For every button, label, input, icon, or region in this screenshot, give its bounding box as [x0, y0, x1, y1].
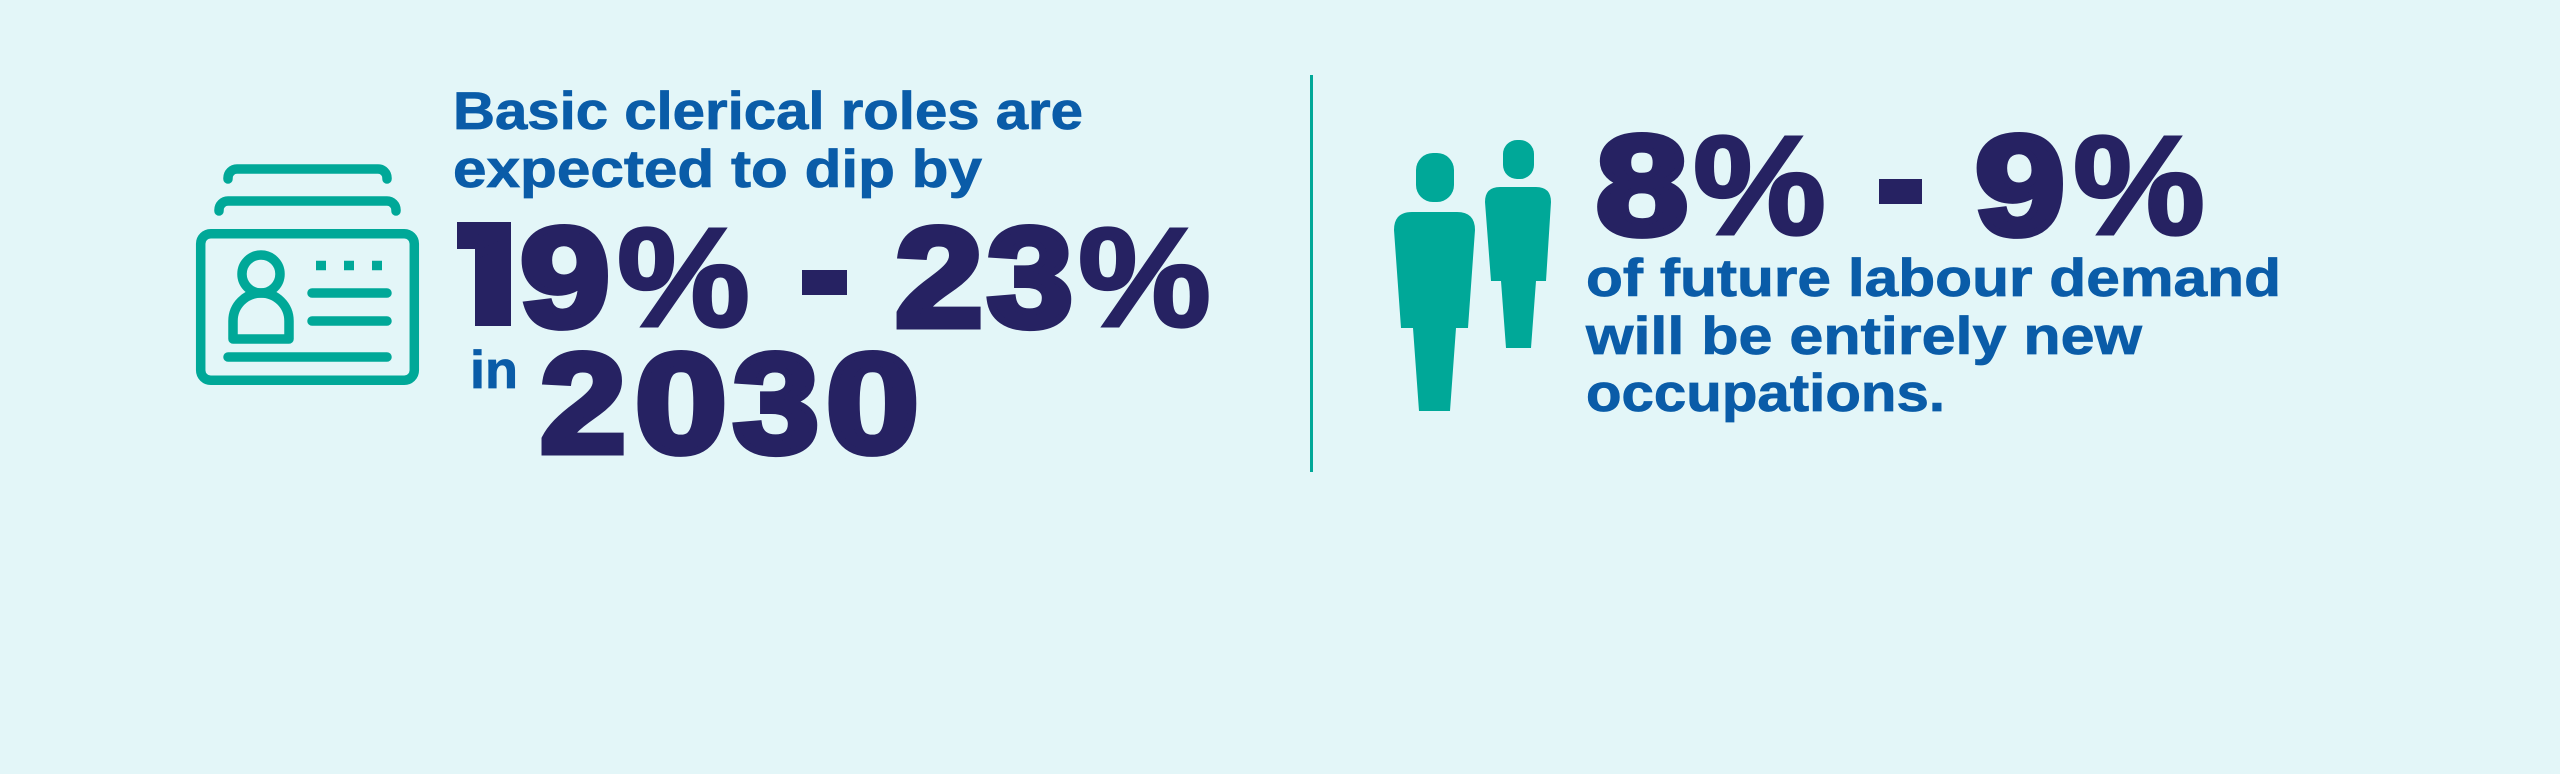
- statistic: 2030: 3: [733, 324, 819, 482]
- text: description line 2: will be entirely new: [1585, 307, 2143, 366]
- statistic: dash: [802, 270, 847, 295]
- heading: clerical roles line 2: expected to dip by: [453, 140, 983, 199]
- statistic: 9%: %: [2073, 106, 2205, 264]
- heading: clerical roles line 1: Basic clerical roles are: [453, 82, 1083, 141]
- statistic: dash: [1879, 179, 1922, 204]
- statistic: 8%: [1596, 106, 1826, 264]
- statistic: 19%: [457, 222, 748, 331]
- statistic: 23%: 2: [895, 198, 983, 356]
- divider: [1310, 75, 1313, 472]
- statistic: 23%: 3: [987, 198, 1073, 356]
- text: in: in: [470, 341, 518, 400]
- panel: new occupations: [1394, 106, 2281, 423]
- panel: clerical roles: [201, 82, 1211, 482]
- icon: two people: [1394, 140, 1551, 411]
- text: description line 3: occupations.: [1586, 364, 1945, 423]
- statistic: 2030: 2: [540, 324, 626, 482]
- statistic: 2030: 0: [635, 324, 727, 482]
- statistic: 2030: 0: [826, 324, 919, 482]
- statistic: 9%: [1975, 106, 2205, 264]
- statistic: 23%: [895, 198, 1211, 356]
- icon: stacked ID cards: [201, 169, 414, 380]
- statistic: 23%: %: [1078, 198, 1211, 356]
- statistic: 19%: 1: [452, 198, 562, 356]
- statistic: 2030: [540, 324, 919, 482]
- statistic: 8%: %: [1693, 106, 1826, 264]
- text: description line 1: of future labour demand: [1586, 249, 2281, 308]
- statistic: 19%: 9: [520, 198, 610, 356]
- statistic: 8%: 8: [1596, 106, 1688, 264]
- statistic: 9%: 9: [1975, 106, 2065, 264]
- statistic: 19%: %: [617, 198, 750, 356]
